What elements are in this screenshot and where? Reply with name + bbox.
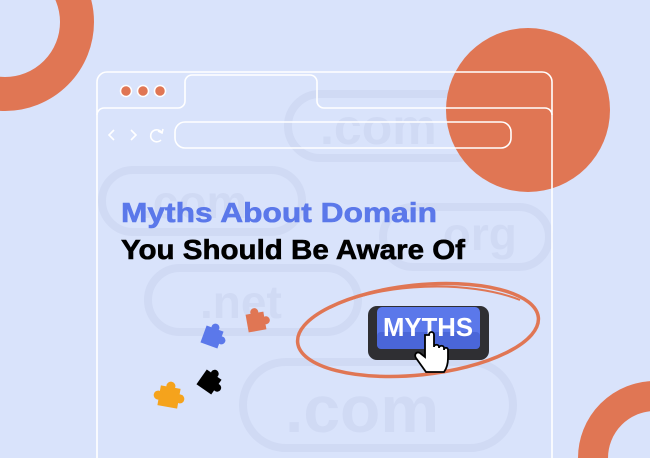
myths button: MYTHS	[383, 312, 473, 342]
text: .org	[430, 208, 517, 260]
icon: blue piece	[200, 321, 230, 350]
icon: orange piece	[245, 306, 271, 332]
window dots	[120, 86, 166, 96]
browser window	[97, 72, 552, 458]
text: .com	[140, 176, 247, 228]
watermark pills	[102, 94, 549, 448]
title	[121, 197, 466, 265]
orange scribble ellipse	[293, 273, 543, 387]
decorative circle: right	[446, 28, 610, 192]
title: You Should Be Aware Of	[121, 234, 466, 265]
text: .com	[285, 372, 439, 446]
icon: black piece	[196, 365, 228, 397]
nav icons	[109, 130, 136, 140]
address bar	[175, 122, 511, 148]
title: Myths About Domain	[121, 197, 437, 228]
text: .com	[320, 99, 437, 155]
decorative circle: top-left ring	[0, 0, 77, 94]
icon: hand cursor	[415, 332, 448, 372]
text: .net	[200, 276, 282, 328]
myths button	[368, 306, 489, 372]
icon: yellow piece	[152, 379, 187, 410]
decorative circle: bottom-right ring	[593, 396, 650, 458]
puzzle pieces	[152, 306, 271, 410]
